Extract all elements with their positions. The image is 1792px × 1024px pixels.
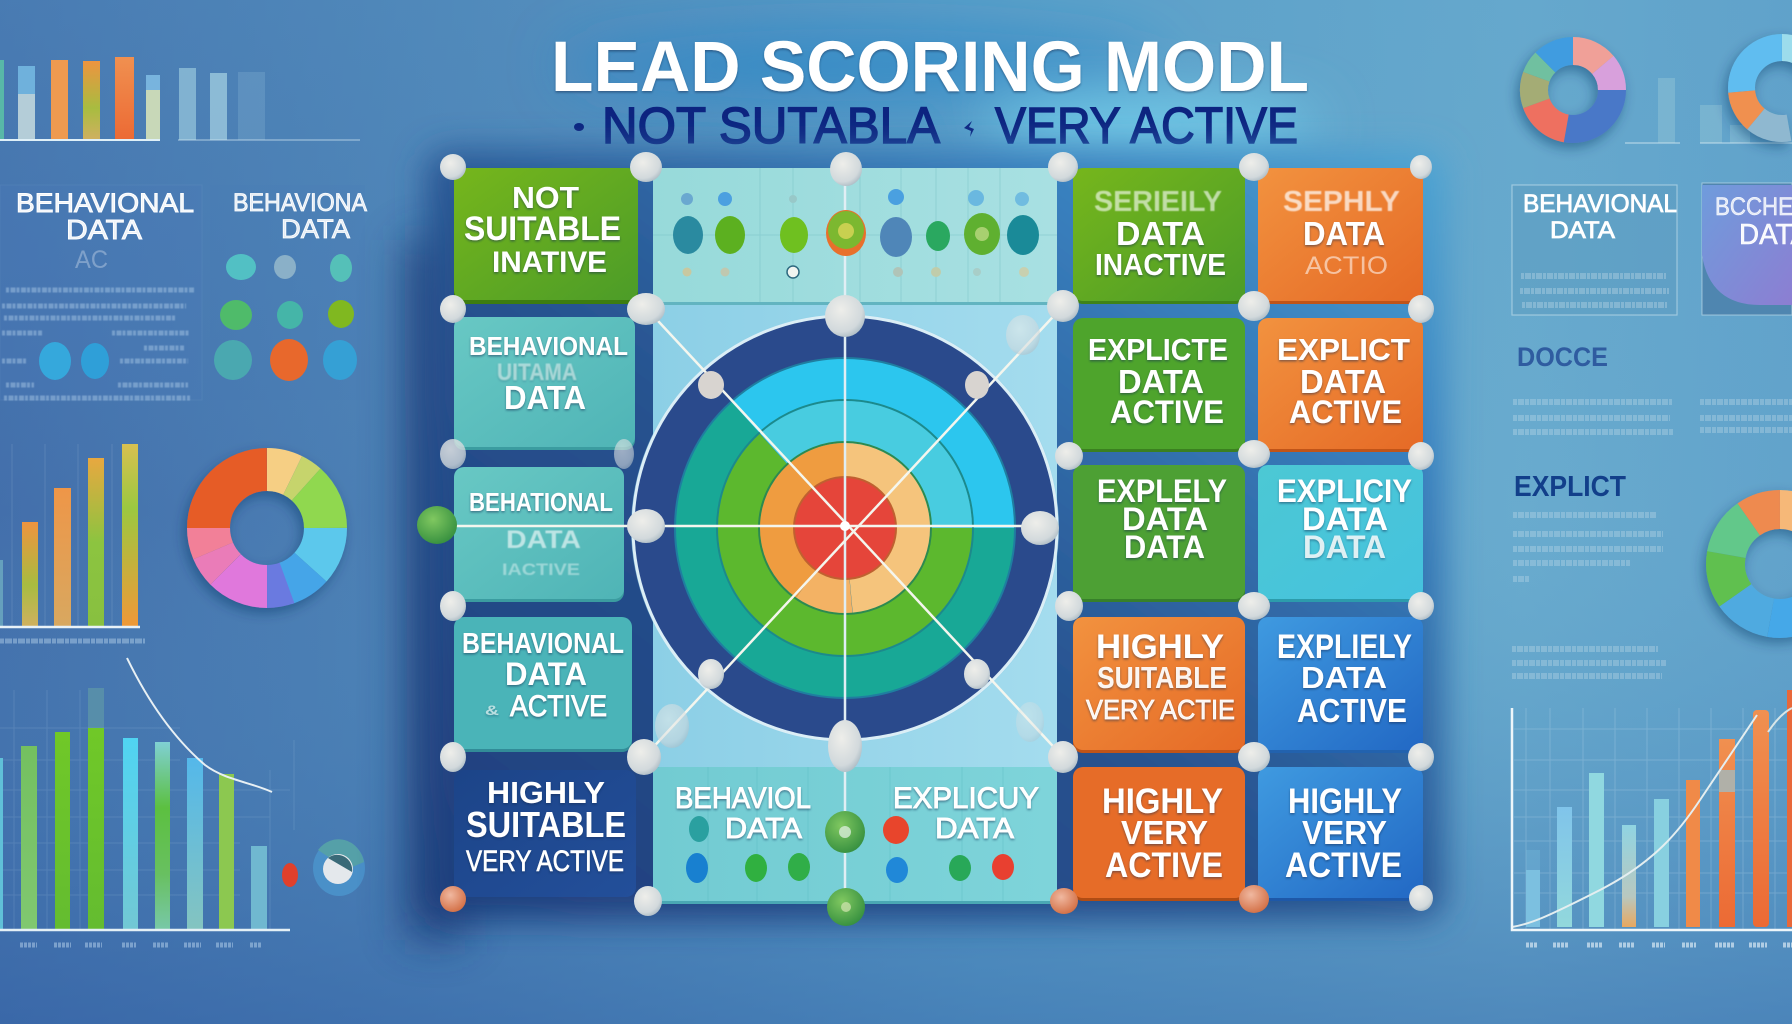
left box: behavioral data: DATA xyxy=(504,379,586,416)
right box: explicly data cyan: DATA xyxy=(1302,501,1388,537)
left chart: top bars xyxy=(0,57,360,140)
left panel: behavioral data 1: DATA xyxy=(66,214,142,245)
right chart: bars with rising curve xyxy=(1512,690,1792,945)
right box: explely data green: DATA xyxy=(1124,529,1205,565)
right box: highly suitable very active orange: HIGHLY xyxy=(1096,628,1224,666)
right box: explicit data active green: EXPLICTE xyxy=(1088,332,1228,367)
right box: highly suitable very active orange: VERY ACTIE xyxy=(1086,694,1235,725)
right box: explicly data cyan: DATA xyxy=(1303,529,1386,565)
right box: seriely data inactive: DATA xyxy=(1116,215,1205,252)
left box: highly suitable very active: SUITABLE xyxy=(466,804,626,845)
small upper markers xyxy=(681,189,1029,206)
title glow xyxy=(560,29,1320,151)
right box: explicly data active blue xyxy=(1258,617,1423,753)
right box: highly very active orange: ACTIVE xyxy=(1105,846,1223,885)
right box: highly very active blue: VERY xyxy=(1302,814,1387,851)
right box: explely data green xyxy=(1073,465,1245,602)
explicit data label: DATA xyxy=(935,813,1015,845)
right box: explicly data active blue: DATA xyxy=(1301,660,1387,695)
panel: bottom data xyxy=(653,767,1057,904)
left panel: behavioral data 2: DATA xyxy=(281,214,350,244)
left box: behavioral data: BEHAVIONAL xyxy=(469,331,628,361)
left box: not suitable inactive xyxy=(454,168,638,304)
right box: explicly data active blue: EXPLIELY xyxy=(1277,628,1412,666)
left box: behavioral data active: ACTIVE xyxy=(510,690,607,723)
left box: behavioral data inactive: DATA xyxy=(506,526,581,554)
left box: highly suitable very active: VERY ACTIVE xyxy=(466,845,624,878)
right: donut 1 xyxy=(1518,35,1628,145)
right box: highly very active orange xyxy=(1073,767,1245,901)
left box: behavioral data active xyxy=(454,617,632,752)
right panel: behavioral data 2 xyxy=(1702,183,1792,315)
right box: explicit data active green: DATA xyxy=(1118,363,1204,400)
right box: explely data green: DATA xyxy=(1122,501,1208,537)
right box: highly very active blue: ACTIVE xyxy=(1285,846,1402,885)
data dots xyxy=(686,816,1014,883)
left box: behavioral data inactive: BEHATIONAL xyxy=(469,487,613,517)
right box: highly very active blue xyxy=(1258,767,1423,901)
left box: behavioral data inactive: IACTIVE xyxy=(502,560,580,579)
left panel: behavioral data 2 xyxy=(210,185,367,400)
title: LEAD SCORING MODL xyxy=(551,28,1309,107)
behavioral data label: DATA xyxy=(725,813,803,845)
right panel: behavioral data 1 xyxy=(1512,185,1677,315)
left box: behavioral data active: DATA xyxy=(505,656,587,692)
connector lines xyxy=(437,168,1063,907)
right box: seriely data inactive xyxy=(1073,168,1245,304)
right box: explicit data active orange: ACTIVE xyxy=(1289,394,1402,430)
right: explicit text block xyxy=(1512,515,1666,676)
right: label docce: DOCCE xyxy=(1517,342,1608,372)
left box: not suitable inactive: NOT xyxy=(512,180,579,215)
status dot xyxy=(81,343,109,379)
panel: top dots xyxy=(653,168,1057,305)
right box: highly very active orange: HIGHLY xyxy=(1102,782,1223,821)
subtitle: VERY ACTIVE xyxy=(995,97,1298,154)
left panel: behavioral data 1 xyxy=(0,185,202,400)
left shadow of board xyxy=(405,240,465,940)
grid nodes xyxy=(440,152,1434,916)
left box: behavioral data active: BEHAVIONAL xyxy=(462,628,624,660)
left panel: behavioral data 2: BEHAVIONA xyxy=(233,189,367,217)
ring: orange xyxy=(750,433,940,623)
right: text block xyxy=(1513,402,1792,432)
left box: behavioral data xyxy=(454,317,635,450)
right box: explicly data active blue: ACTIVE xyxy=(1297,692,1407,729)
left chart: bottom bars with curve xyxy=(0,658,294,945)
behavioral data label xyxy=(675,782,811,845)
right box: explely data green: EXPLELY xyxy=(1097,473,1227,509)
right box: sephly data actio xyxy=(1258,168,1423,304)
right box: explicit data active green xyxy=(1073,318,1245,452)
right: donut 2 xyxy=(1725,31,1792,145)
main dots row xyxy=(673,213,1039,257)
right box: explicit data active orange: DATA xyxy=(1300,363,1386,400)
right box: explicit data active orange: EXPLICT xyxy=(1277,332,1410,367)
right: label explicit: EXPLICT xyxy=(1514,471,1626,503)
right box: highly suitable very active orange xyxy=(1073,617,1245,753)
left box: not suitable inactive: SUITABLE xyxy=(464,210,621,248)
right box: sephly data actio: ACTIO xyxy=(1305,252,1388,280)
panel: center board xyxy=(653,302,1057,767)
ring: outer cyan and teal xyxy=(636,319,1054,737)
right panel: behavioral data 1: BEHAVIONAL xyxy=(1523,190,1677,218)
explicit data label: EXPLICUY xyxy=(893,782,1039,815)
icon: red marker xyxy=(282,863,298,887)
left box: behavioral data inactive xyxy=(454,467,624,602)
left box: not suitable inactive: INATIVE xyxy=(492,246,607,279)
left box: highly suitable very active: HIGHLY xyxy=(487,775,605,810)
board backdrop xyxy=(425,150,1445,920)
left box: highly suitable very active xyxy=(454,770,636,897)
ring: green and light teal xyxy=(695,378,995,678)
right box: sephly data actio: SEPHLY xyxy=(1283,186,1400,218)
right panel: behavioral data 1: DATA xyxy=(1550,217,1615,244)
right box: explicit data active orange xyxy=(1258,318,1423,452)
donut chart: left xyxy=(184,445,350,611)
right box: sephly data actio: DATA xyxy=(1303,215,1385,252)
right: faint bars xyxy=(1625,78,1792,143)
right box: highly very active blue: HIGHLY xyxy=(1288,782,1402,821)
right box: explicly data cyan: EXPLICIY xyxy=(1277,473,1412,509)
left panel: behavioral data 1: BEHAVIONAL xyxy=(16,188,194,218)
left chart: middle bars xyxy=(0,444,145,641)
subtitle xyxy=(574,97,1298,154)
right: donut 3 xyxy=(1704,488,1792,640)
status dot xyxy=(39,342,71,380)
left box: behavioral data active: & xyxy=(485,702,499,718)
behavioral data label: BEHAVIOL xyxy=(675,782,811,815)
left box: behavioral data: UITAMA xyxy=(497,359,577,386)
right box: highly suitable very active orange: SUITABLE xyxy=(1097,660,1227,695)
right box: explicly data cyan xyxy=(1258,465,1423,602)
target: concentric rings xyxy=(631,314,1059,742)
coloured nodes xyxy=(417,210,1269,926)
bullseye xyxy=(794,477,896,579)
right box: highly very active orange: VERY xyxy=(1121,814,1208,851)
left panel: behavioral data 1: AC xyxy=(75,246,108,274)
right box: seriely data inactive: INACTIVE xyxy=(1095,247,1226,282)
right box: seriely data inactive: SERIEILY xyxy=(1094,186,1222,218)
icon: ring gauge xyxy=(313,839,365,896)
subtitle: NOT SUTABLA xyxy=(602,97,940,154)
explicit data label xyxy=(893,782,1039,845)
right box: explicit data active green: ACTIVE xyxy=(1110,394,1224,430)
small lower markers xyxy=(682,266,1029,278)
